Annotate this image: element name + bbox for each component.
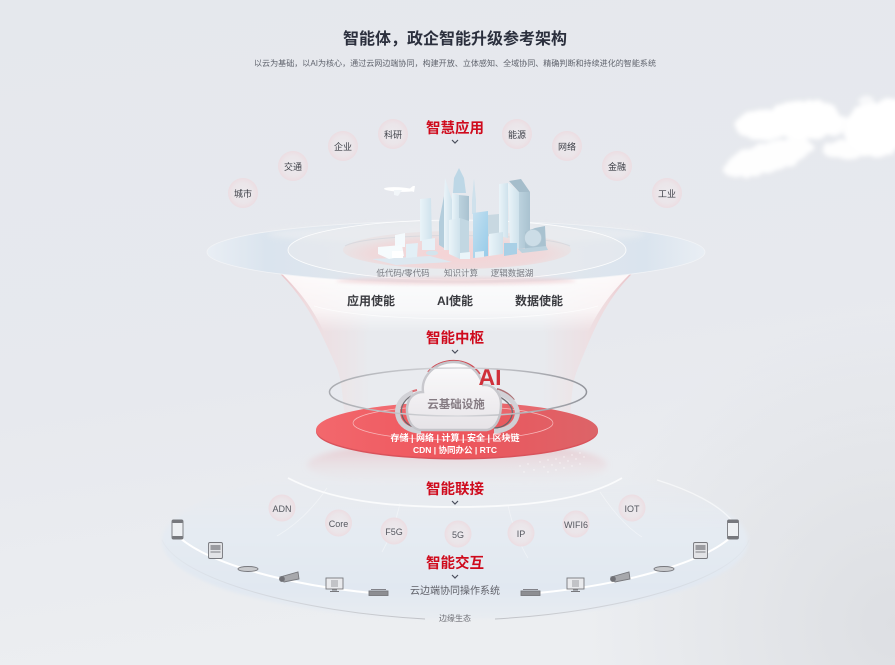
icon: phone right bbox=[728, 520, 738, 539]
left tower bbox=[420, 198, 432, 241]
centre top rim bbox=[345, 236, 570, 246]
enablement labels: 应用使能 bbox=[347, 293, 395, 308]
white ring bbox=[288, 220, 626, 280]
middle heading: 智能中枢 bbox=[426, 329, 484, 347]
arrow bbox=[452, 140, 458, 143]
pink centre bbox=[343, 231, 571, 269]
cloud label: 云基础设施 bbox=[427, 397, 485, 411]
bubble: Core bbox=[325, 510, 352, 536]
os label: 云边端协同操作系统 bbox=[410, 584, 500, 597]
cloud left wing bbox=[398, 393, 421, 431]
bottom pink glow bbox=[336, 277, 576, 285]
thin spire bbox=[472, 178, 476, 214]
arrow bbox=[452, 350, 458, 353]
edge ecosystem label: 边缘生态 bbox=[439, 613, 471, 623]
red disc bbox=[307, 402, 607, 489]
upper guide arcs bbox=[277, 478, 733, 558]
bubble: F5G: F5G bbox=[385, 527, 403, 537]
infrastructure text: 存储 | 网络 | 计算 | 安全 | 区块链 bbox=[390, 432, 520, 443]
disc reflection bbox=[266, 225, 646, 243]
bubble: Core: Core bbox=[329, 519, 348, 529]
funnel between top and middle bbox=[276, 270, 636, 415]
disc edge bbox=[316, 404, 598, 460]
connectivity bubbles bbox=[268, 494, 646, 548]
interaction heading: 智能交互 bbox=[426, 554, 484, 572]
inner ring bbox=[353, 406, 553, 440]
subtitle: 以云为基础，以AI为核心，通过云网边端协同，构建开放、立体感知、全域协同、精确判断和持续进化的智能系统 bbox=[254, 58, 656, 68]
bubble: ADN bbox=[268, 494, 296, 522]
bubble: IP bbox=[508, 520, 534, 546]
bubble: research bbox=[378, 119, 408, 149]
icon: monitor left bbox=[326, 578, 343, 592]
arrow bbox=[452, 501, 458, 504]
blade tower bbox=[439, 196, 444, 248]
bubble: WIFI6 bbox=[562, 510, 590, 538]
connectivity heading: 智能联接 bbox=[426, 480, 484, 498]
layer: smart interaction lower platform bbox=[162, 463, 749, 619]
globe backing bbox=[525, 226, 546, 249]
cloud right wing red tint bbox=[497, 389, 514, 400]
bubble: IOT bbox=[618, 494, 646, 522]
icon: monitor right bbox=[567, 578, 584, 592]
bubble: IOT: IOT bbox=[624, 504, 640, 514]
icon: server right bbox=[521, 590, 540, 596]
icon: globe bbox=[524, 230, 542, 246]
disc top bbox=[316, 402, 598, 458]
cloud red accent bbox=[428, 361, 480, 374]
title: 智能体，政企智能升级参考架构 bbox=[343, 29, 567, 48]
infrastructure text bbox=[390, 432, 520, 455]
icon: kiosk left bbox=[208, 542, 222, 558]
glass ring bbox=[330, 368, 586, 416]
bubble: network: 网络 bbox=[558, 141, 576, 152]
low left blocks bbox=[395, 233, 405, 247]
narrow tower bbox=[499, 183, 508, 238]
icon: camera right bbox=[610, 572, 630, 582]
bubble: 5G bbox=[444, 520, 472, 548]
top funnel white band bbox=[278, 270, 634, 332]
cloud left wing red tint bbox=[404, 390, 417, 397]
icon: phone left bbox=[172, 520, 183, 539]
bubble: energy bbox=[502, 119, 532, 149]
icon: city skyline bbox=[372, 159, 548, 265]
bubble: city: 城市 bbox=[234, 188, 252, 199]
right large tower bbox=[508, 183, 519, 249]
bubble: F5G bbox=[380, 518, 408, 544]
infrastructure text: CDN | 协同办公 | RTC bbox=[413, 445, 497, 455]
top heading: 智慧应用 bbox=[426, 119, 484, 137]
blue block bbox=[473, 211, 488, 258]
bubble: finance bbox=[602, 151, 632, 181]
icon: camera left bbox=[280, 572, 299, 582]
grey block bbox=[488, 214, 499, 236]
central tower bbox=[453, 159, 465, 193]
platform capability labels: 知识计算 bbox=[444, 268, 478, 278]
arrow bbox=[452, 575, 458, 578]
bubble: WIFI6: WIFI6 bbox=[564, 520, 588, 530]
application bubbles bbox=[228, 119, 682, 208]
bubble: research: 科研 bbox=[384, 129, 402, 140]
enablement labels: 数据使能 bbox=[515, 293, 563, 308]
front block bbox=[449, 218, 460, 259]
top platform bbox=[207, 220, 705, 285]
front low block bbox=[489, 232, 503, 256]
bubble: network bbox=[552, 131, 582, 161]
sky clouds bbox=[720, 97, 895, 185]
icon: server left bbox=[369, 590, 388, 596]
disc glow bbox=[307, 441, 607, 489]
cloud right wing inner bbox=[494, 396, 512, 428]
AI label: AI bbox=[478, 364, 502, 390]
platform capability labels bbox=[376, 268, 533, 278]
bubble: industry: 工业 bbox=[658, 189, 676, 199]
outer rim arcs bbox=[162, 540, 425, 619]
funnel lower rim bbox=[314, 306, 598, 319]
icon: kiosk right bbox=[694, 542, 708, 558]
bubble: ADN: ADN bbox=[272, 504, 292, 514]
bubble: transport bbox=[278, 151, 308, 181]
bubble: industry bbox=[652, 178, 682, 208]
icon: router right bbox=[654, 566, 674, 572]
bubble: city bbox=[228, 178, 258, 208]
bubble: IP: IP bbox=[517, 529, 525, 539]
bubble: finance: 金融 bbox=[608, 161, 626, 172]
bubble: 5G: 5G bbox=[452, 530, 464, 540]
icon: router left bbox=[238, 566, 258, 572]
cloud left wing inner bbox=[401, 396, 421, 428]
cloud body bbox=[407, 362, 501, 430]
enablement labels: AI使能 bbox=[437, 293, 473, 308]
cloud right wing bbox=[494, 392, 517, 431]
bubble: enterprise: 企业 bbox=[334, 141, 352, 152]
device arc bbox=[180, 538, 730, 593]
bubble: enterprise bbox=[328, 131, 358, 161]
bubble: transport: 交通 bbox=[284, 161, 302, 172]
platform capability labels: 低代码/零代码 bbox=[376, 268, 430, 278]
disc bbox=[207, 221, 705, 283]
halftone dots bbox=[519, 452, 585, 473]
enablement labels bbox=[347, 293, 563, 308]
icon: airplane bbox=[384, 186, 415, 196]
lower platform disc bbox=[162, 463, 748, 619]
platform capability labels: 逻辑数据湖 bbox=[491, 268, 533, 278]
bubble: energy: 能源 bbox=[508, 129, 526, 140]
edge devices bbox=[172, 520, 738, 596]
cloud infrastructure bbox=[398, 361, 517, 431]
